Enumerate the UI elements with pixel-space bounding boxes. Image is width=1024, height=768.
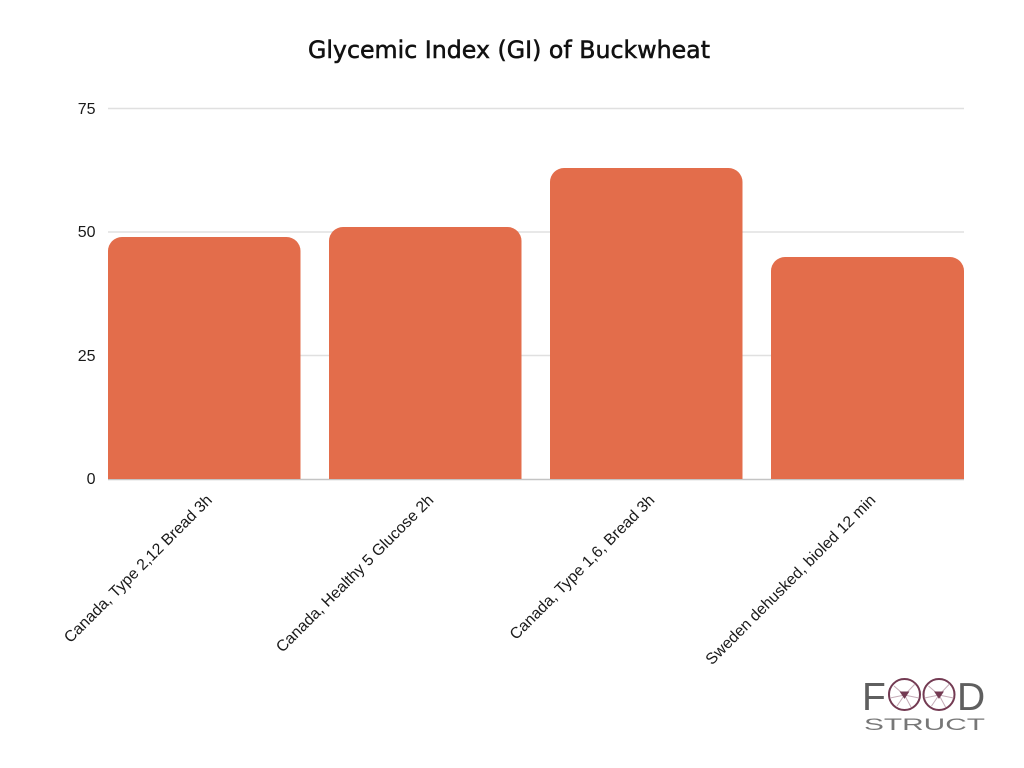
x-axis labels: Canada, Type 1,6, Bread 3h (507, 492, 658, 643)
bar: Canada, Type 1,6, Bread 3h = 63 (550, 168, 742, 479)
bar: Canada, Type 2,12 Bread 3h = 49 (108, 237, 300, 479)
logo letter F: F (862, 676, 886, 719)
x-axis labels: Canada, Type 2,12 Bread 3h (61, 492, 216, 646)
bar: Sweden dehusked, bioled 12 min = 45 (771, 257, 964, 479)
logo letter D: D (957, 676, 985, 719)
logo word STRUCT: STRUCT (864, 715, 985, 734)
y-axis labels: 0 (87, 471, 96, 488)
y-axis labels (78, 101, 96, 488)
x-axis labels (61, 492, 879, 668)
y-axis gridlines (108, 108, 964, 480)
y-axis labels: 25 (78, 348, 96, 365)
title: Glycemic Index (GI) of Buckwheat (308, 36, 710, 64)
bar: Canada, Healthy 5 Glucose 2h = 51 (329, 227, 522, 479)
x-axis labels: Canada, Healthy 5 Glucose 2h (273, 492, 437, 656)
chart (61, 101, 964, 668)
y-axis labels: 75 (78, 101, 96, 118)
x-axis labels: Sweden dehusked, bioled 12 min (703, 492, 879, 668)
logo wheel right (924, 679, 954, 710)
y-axis labels: 50 (78, 224, 96, 241)
bars (108, 168, 964, 479)
logo wheel left (889, 679, 920, 710)
logo: FoodStruct (862, 676, 985, 734)
